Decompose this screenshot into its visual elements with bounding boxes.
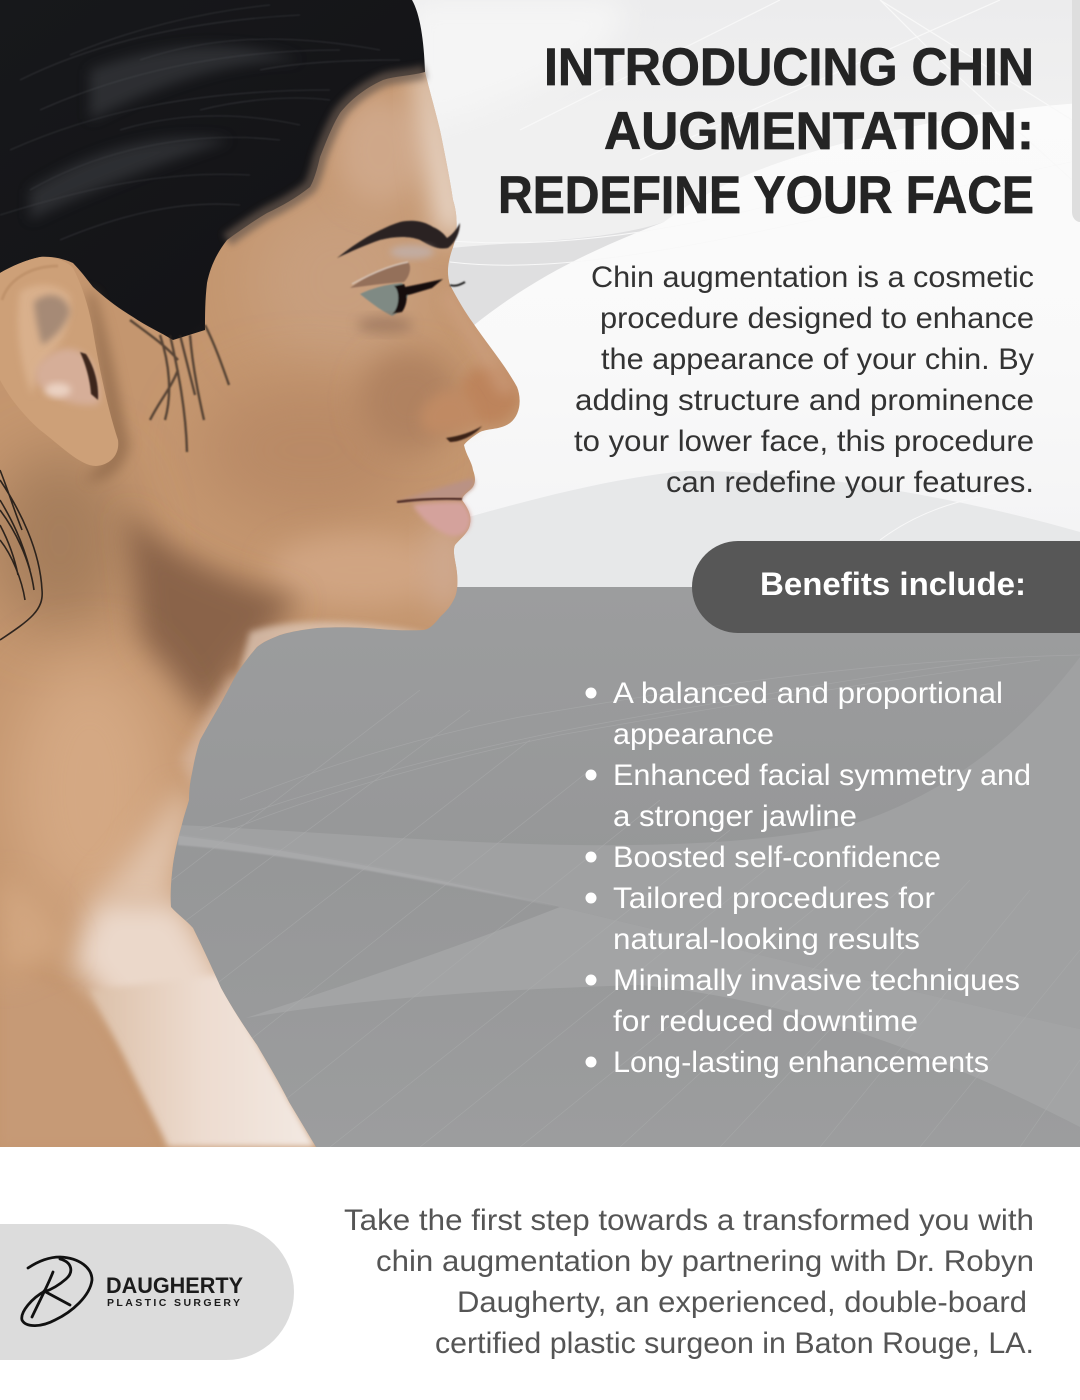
benefits list: for reduced downtime [613,1005,918,1038]
eyebrow [337,221,460,258]
closing text block: chin augmentation by partnering with Dr. Robyn [376,1245,1034,1278]
logo wordmark: DAUGHERTY [106,1273,243,1298]
closing text block: certified plastic surgeon in Baton Rouge, LA. [435,1327,1034,1360]
benefits list: a stronger jawline [613,800,857,833]
eye [350,262,465,316]
hair [0,0,425,340]
hair shine strands [0,5,400,240]
benefits list: Enhanced facial symmetry and [613,759,1031,792]
hairline transition [227,72,425,240]
ear [0,257,118,466]
nose wing [420,390,482,442]
shadow around ear [85,290,130,481]
nape hair [0,470,42,640]
hair grey sheen [30,46,300,220]
title: REDEFINE YOUR FACE [498,166,1034,225]
benefits list: A balanced and proportional [613,677,1003,710]
closing text block: Take the first step towards a transformed you with [344,1204,1034,1237]
title [498,38,1034,225]
benefits list: Minimally invasive techniques [613,964,1020,997]
eye socket shadow [357,316,413,334]
intro text block: can redefine your features. [666,466,1034,499]
title: AUGMENTATION: [604,102,1034,161]
woman's profile photo illustration [0,0,540,1147]
benefits list: Long-lasting enhancements [613,1046,989,1079]
intro text block: to your lower face, this procedure [574,425,1034,458]
benefits heading pill: Benefits include: [760,566,1026,602]
intro text block: Chin augmentation is a cosmetic [591,261,1034,294]
lips [397,478,474,536]
benefits list: Tailored procedures for [613,882,935,915]
hair wisps near temple [130,320,229,452]
closing text block [344,1204,1034,1360]
right edge bar [1072,0,1080,222]
benefits list [586,677,1031,1079]
intro text block: adding structure and prominence [575,384,1034,417]
intro text block: procedure designed to enhance [600,302,1034,335]
logo mark [22,1257,92,1326]
benefits heading pill [692,541,1080,633]
title: INTRODUCING CHIN [544,38,1034,97]
background: light upper panel [0,0,1080,590]
intro text block: the appearance of your chin. By [601,343,1034,376]
closing text block: Daugherty, an experienced, double-board [457,1286,1027,1319]
logo pill: PLASTIC SURGERY [107,1297,240,1309]
white footer band [0,1147,1080,1400]
benefits list: appearance [613,718,774,751]
background: grey lower panel [0,587,1080,1147]
benefits list: Boosted self-confidence [613,841,941,874]
skin: face, neck and shoulder [0,0,540,1147]
logo pill [0,1224,294,1360]
benefits list: natural-looking results [613,923,920,956]
brow bone highlight [390,245,434,259]
intro text block [574,261,1034,499]
